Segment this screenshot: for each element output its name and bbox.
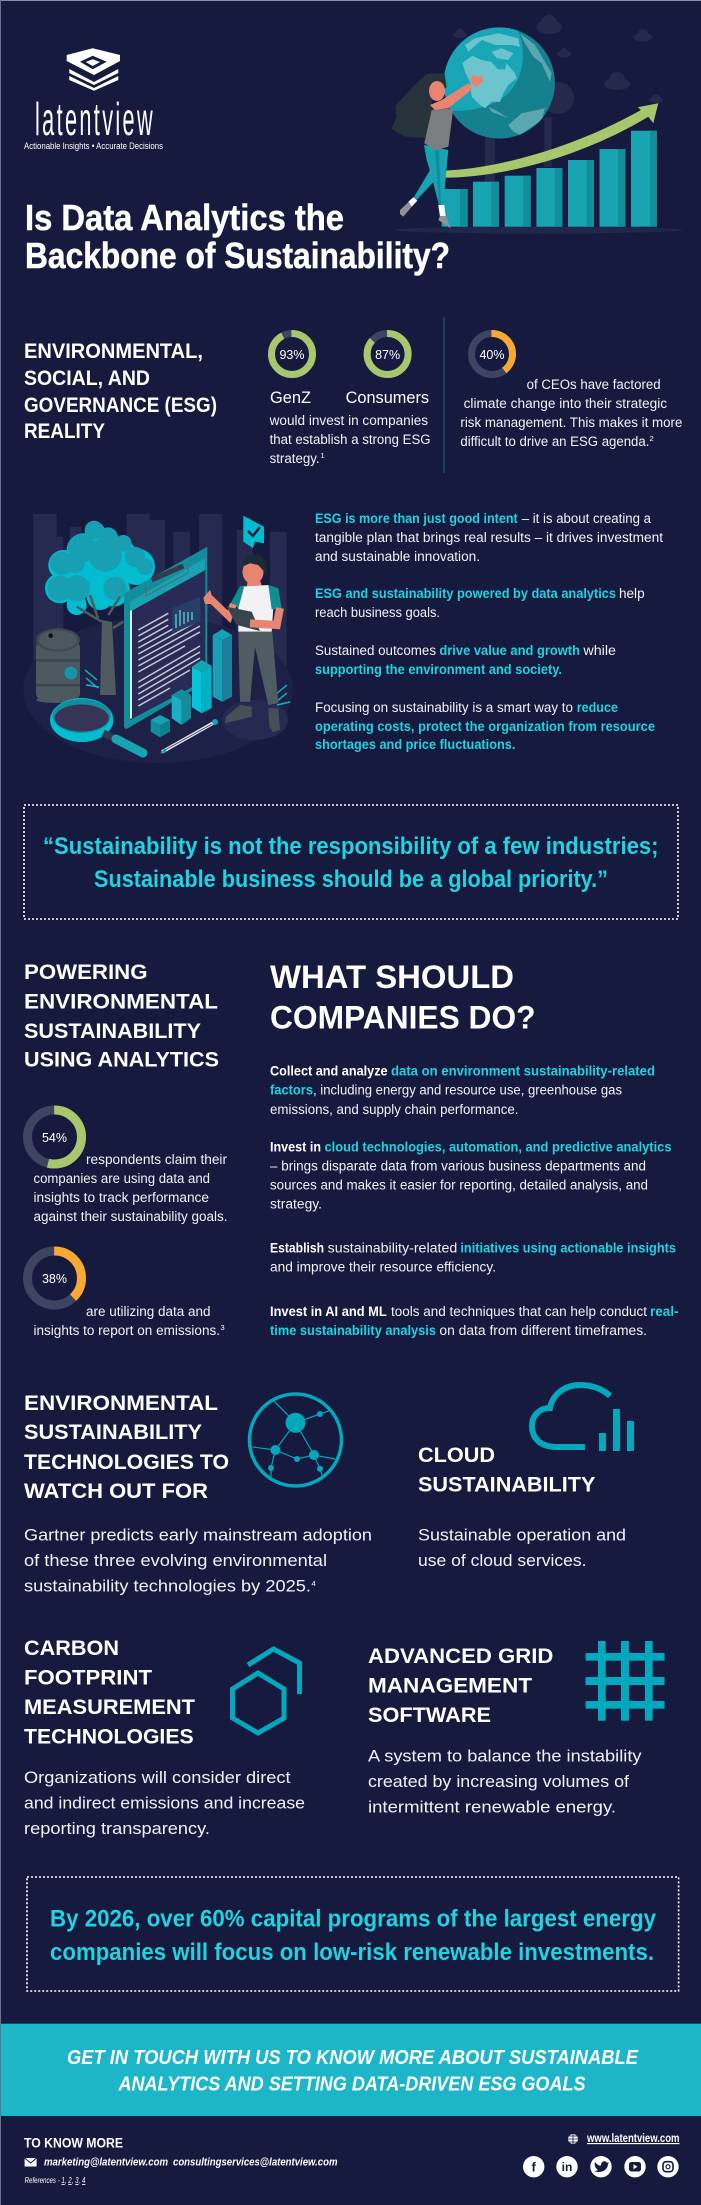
text: 54% stat (34, 1152, 228, 1224)
heading: cloud sustainability (418, 1444, 595, 1497)
heading: technologies to watch: TECHNOLOGIES TO (24, 1451, 229, 1474)
text: ESG explanation: Sustained outcomes (315, 643, 436, 658)
text: what companies should do list: Invest in (270, 1140, 321, 1155)
heading: technologies to watch: WATCH OUT FOR (24, 1480, 208, 1503)
text: ESG explanation: – it is about creating a (522, 511, 651, 526)
donut: 40% CEOs (472, 334, 512, 374)
heading: ESG reality: ENVIRONMENTAL, (24, 340, 203, 363)
text: CEOs stat: of CEOs have factored (527, 377, 661, 392)
heading: what should companies do: WHAT SHOULD (270, 959, 514, 995)
heading: advanced grid management: ADVANCED GRID (368, 1645, 553, 1668)
heading: powering environmental sustainability (24, 961, 219, 1072)
text: GenZ and consumers stat: would invest in companies (269, 413, 428, 428)
text: what companies should do list: factors (270, 1083, 313, 1098)
callout: sustainability quote: Sustainable business should be a global priority.” (94, 866, 608, 893)
logo: LatentView (24, 48, 163, 151)
heading: carbon footprint: TECHNOLOGIES (24, 1726, 194, 1749)
text: ESG explanation: ESG and sustainability powered by data analytics (315, 586, 616, 601)
heading: advanced grid management (368, 1645, 553, 1727)
donut: 93% GenZ: 93% (279, 348, 305, 362)
title: Backbone of Sustainability? (25, 235, 450, 276)
icon: network globe (250, 1394, 342, 1486)
panel: call to action band: ANALYTICS AND SETTING DATA-DRIVEN ESG GOALS (118, 2073, 586, 2096)
text: carbon footprint description: reporting transparency. (24, 1819, 210, 1838)
text: GenZ and consumers stat: strategy. (270, 451, 320, 466)
footer: contact details: TO KNOW MORE (24, 2135, 123, 2150)
heading: ESG reality: SOCIAL, AND (24, 367, 150, 390)
icon: grid (586, 1641, 665, 1721)
text: what companies should do list: – brings disparate data from various business departments and (270, 1159, 646, 1174)
callout: 2026 renewable investments: By 2026, over 60% capital programs of the largest energy (50, 1906, 657, 1933)
logo: LatentView: Actionable Insights • Accurate Decisions (24, 141, 163, 151)
heading: powering environmental sustainability: ENVIRONMENTAL (24, 991, 218, 1014)
text: carbon footprint description (24, 1768, 305, 1838)
callout: 2026 renewable investments (27, 1877, 679, 1991)
text: Gartner prediction: Gartner predicts early mainstream adoption (24, 1526, 372, 1545)
text: what companies should do list: sources and makes it easier for reporting, detailed analysis, and (270, 1178, 648, 1193)
text: CEOs stat: 2 (650, 434, 654, 443)
heading: powering environmental sustainability: POWERING (24, 961, 148, 984)
donut: 40% CEOs: 40% (479, 348, 505, 362)
panel: call to action band (1, 2024, 701, 2116)
heading: ESG reality (24, 340, 217, 443)
heading: advanced grid management: MANAGEMENT (368, 1675, 532, 1698)
text: what companies should do list: and improve their resource efficiency. (270, 1260, 496, 1275)
text: ESG explanation: supporting the environment and society. (315, 662, 562, 677)
text: GenZ and consumers stat (269, 389, 431, 466)
heading: ESG reality: REALITY (24, 420, 105, 443)
heading: what should companies do: COMPANIES DO? (270, 1000, 536, 1036)
text: what companies should do list: sustainability-related (328, 1241, 457, 1256)
text: Gartner prediction (24, 1526, 372, 1596)
text: grid description: intermittent renewable energy. (368, 1798, 616, 1817)
heading: cloud sustainability: SUSTAINABILITY (418, 1474, 595, 1497)
callout: sustainability quote (24, 805, 678, 919)
text: ESG explanation (315, 511, 663, 752)
donut: 93% GenZ (272, 334, 312, 374)
heading: technologies to watch: ENVIRONMENTAL (24, 1392, 218, 1415)
text: 54% stat: insights to track performance (34, 1190, 209, 1205)
text: what companies should do list: Collect and analyze (270, 1064, 388, 1079)
title (25, 197, 450, 276)
text: 38% stat (34, 1304, 225, 1338)
callout: 2026 renewable investments: companies will focus on low-risk renewable investments. (50, 1939, 654, 1966)
text: 38% stat: insights to report on emissions. (34, 1323, 220, 1338)
heading: cloud sustainability: CLOUD (418, 1444, 495, 1467)
text: CEOs stat: risk management. This makes it more (460, 415, 682, 430)
heading: ESG reality: GOVERNANCE (ESG) (24, 394, 217, 417)
text: what companies should do list: strategy. (270, 1197, 322, 1212)
text: Gartner prediction: of these three evolving environmental (24, 1551, 327, 1570)
text: what companies should do list: Invest in AI and ML (270, 1304, 387, 1319)
heading: powering environmental sustainability: USING ANALYTICS (24, 1049, 219, 1072)
text: 54% stat: companies are using data and (34, 1171, 210, 1186)
text: 54% stat: respondents claim their (86, 1152, 227, 1167)
text: grid description: A system to balance the instability (368, 1747, 642, 1766)
heading: what should companies do (270, 959, 536, 1036)
heading: carbon footprint: FOOTPRINT (24, 1667, 152, 1690)
footer: website link: www.latentview.com (586, 2133, 680, 2145)
heading: advanced grid management: SOFTWARE (368, 1704, 491, 1727)
title: Is Data Analytics the (25, 197, 344, 238)
footer: contact details: References - 1, 2, 3, 4 (25, 2175, 86, 2185)
text: what companies should do list: , including energy and resource use, greenhouse gas (313, 1083, 622, 1098)
text: cloud sustainability description: use of cloud services. (418, 1551, 586, 1570)
footer: social icons (523, 2156, 679, 2177)
text: GenZ and consumers stat: that establish a strong ESG (270, 432, 431, 447)
donut: 54% respondents (28, 1110, 82, 1164)
text: CEOs stat: climate change into their strategic (464, 396, 667, 411)
footer: contact details: consultingservices@latentview.com (173, 2157, 338, 2169)
text: ESG explanation: operating costs, protect the organization from resource (315, 719, 655, 734)
heading: carbon footprint: MEASUREMENT (24, 1696, 195, 1719)
illustration: man with clipboard, tree, barrel and magnifier (23, 514, 293, 763)
footer: contact details: marketing@latentview.com (44, 2157, 168, 2169)
text: 38% stat: are utilizing data and (86, 1304, 210, 1319)
text: CEOs stat: difficult to drive an ESG agenda. (460, 434, 649, 449)
text: ESG explanation: drive value and growth (439, 643, 580, 658)
footer: social icons: f (532, 2160, 537, 2174)
text: carbon footprint description: Organizations will consider direct (24, 1768, 291, 1787)
donut: 54% respondents: 54% (42, 1131, 67, 1145)
text: ESG explanation: tangible plan that brings real results – it drives investment (315, 530, 663, 545)
heading: technologies to watch (24, 1392, 229, 1503)
hero illustration: woman holding globe over growing bar chart (393, 15, 683, 234)
panel: call to action band: GET IN TOUCH WITH US TO KNOW MORE ABOUT SUSTAINABLE (67, 2046, 639, 2069)
text: ESG explanation: shortages and price fluctuations. (315, 737, 515, 752)
text: cloud sustainability description: Sustainable operation and (418, 1526, 626, 1545)
text: what companies should do list: tools and techniques that can help conduct (391, 1304, 647, 1319)
donut: 87% Consumers (367, 334, 408, 374)
text: GenZ and consumers stat: Consumers (346, 389, 429, 407)
callout: sustainability quote: “Sustainability is not the responsibility of a few industries; (43, 833, 658, 860)
heading: carbon footprint (24, 1637, 195, 1749)
text: ESG explanation: while (582, 643, 616, 658)
text: 54% stat: against their sustainability goals. (34, 1209, 228, 1224)
text: what companies should do list: cloud technologies, automation, and predictive analytics (324, 1140, 672, 1155)
text: what companies should do list: emissions, and supply chain performance. (270, 1102, 518, 1117)
donut: 38% emissions (28, 1251, 82, 1305)
heading: powering environmental sustainability: SUSTAINABILITY (24, 1020, 201, 1043)
text: what companies should do list: real- (650, 1304, 679, 1319)
text: grid description (368, 1747, 642, 1817)
text: ESG explanation: ESG is more than just good intent (315, 511, 518, 526)
text: Gartner prediction: 4 (312, 1579, 316, 1588)
text: CEOs stat (460, 377, 682, 449)
icon: hexagons (232, 1649, 300, 1733)
heading: carbon footprint: CARBON (24, 1637, 119, 1660)
text: ESG explanation: and sustainable innovation. (315, 549, 480, 564)
text: ESG explanation: reach business goals. (315, 605, 440, 620)
text: what companies should do list (270, 1064, 679, 1338)
text: GenZ and consumers stat: GenZ (270, 389, 311, 407)
text: what companies should do list: data on environment sustainability-related (391, 1064, 655, 1079)
text: cloud sustainability description (418, 1526, 626, 1570)
heading: technologies to watch: SUSTAINABILITY (24, 1421, 202, 1444)
footer: social icons: in (562, 2160, 572, 2174)
footer: contact details (24, 2135, 338, 2185)
text: what companies should do list: Establish (270, 1241, 324, 1256)
donut: 87% Consumers: 87% (375, 348, 400, 362)
icon: cloud with bars (532, 1385, 634, 1451)
text: what companies should do list: on data from different timeframes. (439, 1323, 647, 1338)
text: what companies should do list: time sustainability analysis (270, 1323, 436, 1338)
text: 38% stat: 3 (220, 1323, 225, 1332)
text: grid description: created by increasing volumes of (368, 1772, 629, 1791)
text: ESG explanation: reduce (577, 700, 618, 715)
text: GenZ and consumers stat: 1 (320, 451, 325, 460)
text: ESG explanation: Focusing on sustainability is a smart way to (315, 700, 573, 715)
text: what companies should do list: initiatives using actionable insights (460, 1241, 676, 1256)
text: carbon footprint description: and indirect emissions and increase (24, 1794, 305, 1813)
text: ESG explanation: help (619, 586, 645, 601)
logo: LatentView: latentview (35, 93, 155, 145)
text: Gartner prediction: sustainability technologies by 2025. (24, 1577, 311, 1596)
donut: 38% emissions: 38% (42, 1272, 67, 1286)
